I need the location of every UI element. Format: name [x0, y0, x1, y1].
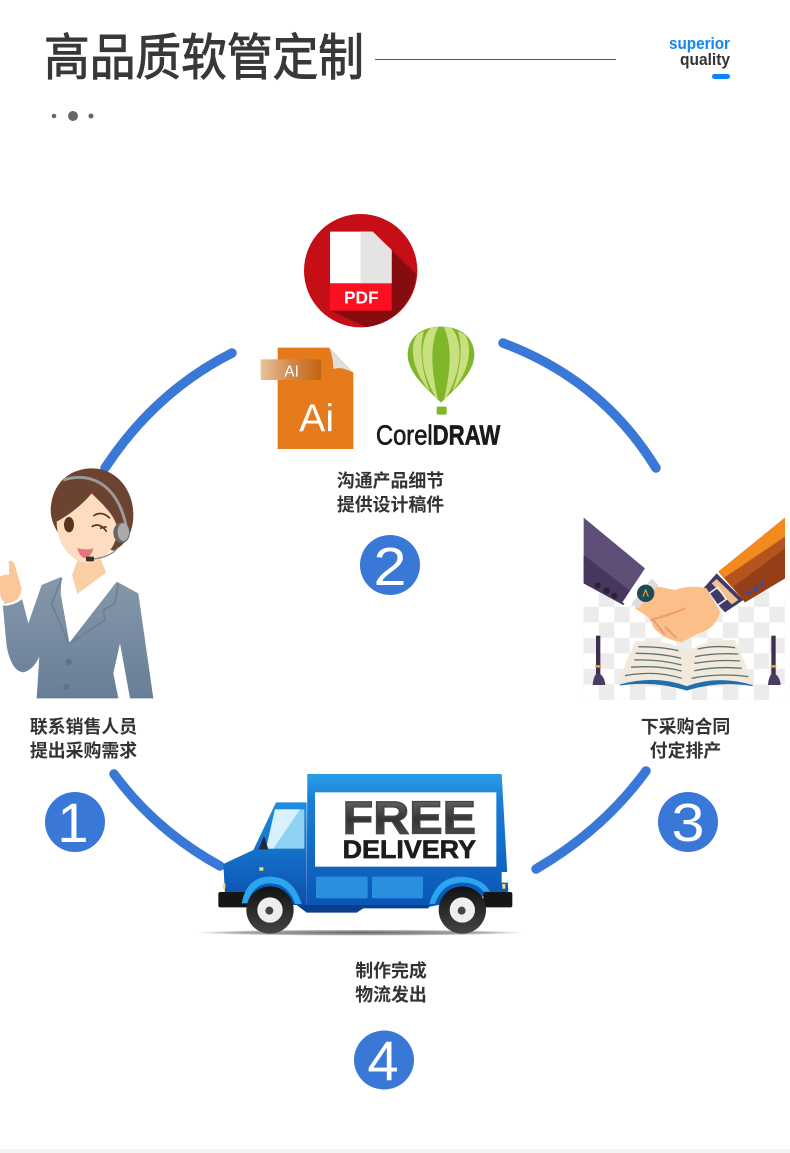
step 4 caption: 物流发出 [355, 984, 427, 1005]
winking eye [92, 513, 110, 532]
step 4 badge [354, 1029, 414, 1092]
lights [223, 867, 508, 889]
mouth [77, 548, 93, 558]
shirt collar [61, 568, 117, 643]
rear wheel [439, 886, 486, 934]
headset ear cup [113, 522, 130, 543]
icon: AI file: Ai [299, 397, 334, 441]
superior quality tag: superior [669, 34, 730, 53]
illustration: handshake over contract [583, 518, 785, 700]
left sleeve [584, 518, 645, 605]
icon: CorelDRAW logo: DRAW [433, 419, 501, 450]
step 3 badge: 3 [672, 793, 704, 853]
cuff [3, 596, 22, 606]
illustration: customer service woman [0, 468, 153, 698]
step 3 caption [641, 716, 730, 761]
cab window [266, 809, 304, 849]
step 3 caption: 下采购合同 [641, 716, 730, 737]
ground shadow [197, 930, 523, 936]
face [57, 493, 117, 563]
icon: AI file [261, 348, 353, 449]
open book [617, 640, 754, 688]
step 2 caption: 提供设计稿件 [337, 494, 444, 515]
icon: CorelDRAW logo: Corel [376, 419, 433, 450]
step 3 badge [658, 792, 718, 853]
cab [223, 802, 307, 905]
suit [3, 576, 153, 698]
step 4 badge: 4 [367, 1029, 399, 1092]
thumb up hand [0, 561, 22, 604]
illustration: free delivery truck: DELIVERY [343, 836, 476, 864]
step 2 caption [337, 471, 444, 515]
wheel arches [242, 877, 302, 904]
step 2 badge: 2 [374, 537, 406, 597]
step 1 caption: 联系销售人员 [30, 716, 137, 737]
front wheel [246, 886, 294, 934]
illustration: free delivery truck [197, 774, 523, 936]
jacket buttons [65, 658, 72, 665]
step 1 caption: 提出采购需求 [30, 741, 137, 761]
icon: AI file: AI [284, 364, 299, 381]
hair back [51, 468, 133, 551]
right pen stand [768, 636, 781, 685]
icon: CorelDRAW logo [376, 327, 501, 450]
wrist watch [632, 578, 658, 608]
illustration: free delivery truck: FREE [343, 791, 476, 843]
header rule [375, 59, 616, 60]
process ring arcs [105, 343, 656, 869]
left eye [64, 517, 74, 532]
neck [72, 557, 106, 594]
wing mirror [258, 836, 268, 849]
superior quality tag: quality [680, 50, 730, 69]
panel hatches [316, 877, 368, 898]
step 2 caption: 沟通产品细节 [337, 471, 444, 491]
bumpers [218, 892, 248, 907]
step 1 badge: 1 [57, 791, 89, 854]
step 4 caption: 制作完成 [355, 960, 427, 981]
step 4 caption [355, 960, 427, 1005]
clasped hands [635, 585, 720, 642]
lapels [52, 578, 118, 643]
headset mic [93, 547, 118, 559]
cargo box [307, 774, 508, 907]
icon: PDF file: PDF [344, 288, 379, 308]
header [44, 30, 730, 121]
bottom grey band [0, 1149, 790, 1153]
right cuff [703, 573, 743, 612]
title: 高品质软管定制 [44, 30, 364, 86]
three dots [52, 111, 94, 121]
step 1 caption [30, 716, 137, 761]
superior quality tag [669, 34, 730, 79]
chassis [297, 905, 430, 913]
free delivery sign [315, 792, 496, 867]
step 2 badge [360, 535, 420, 597]
step 3 caption: 付定排产 [650, 740, 721, 761]
left pen stand [593, 636, 605, 685]
checkerboard [583, 591, 785, 700]
left cuff [622, 568, 652, 607]
right sleeve [718, 518, 785, 602]
step 1 badge [45, 791, 105, 854]
icon: PDF file [304, 214, 417, 327]
headset band [63, 477, 126, 525]
